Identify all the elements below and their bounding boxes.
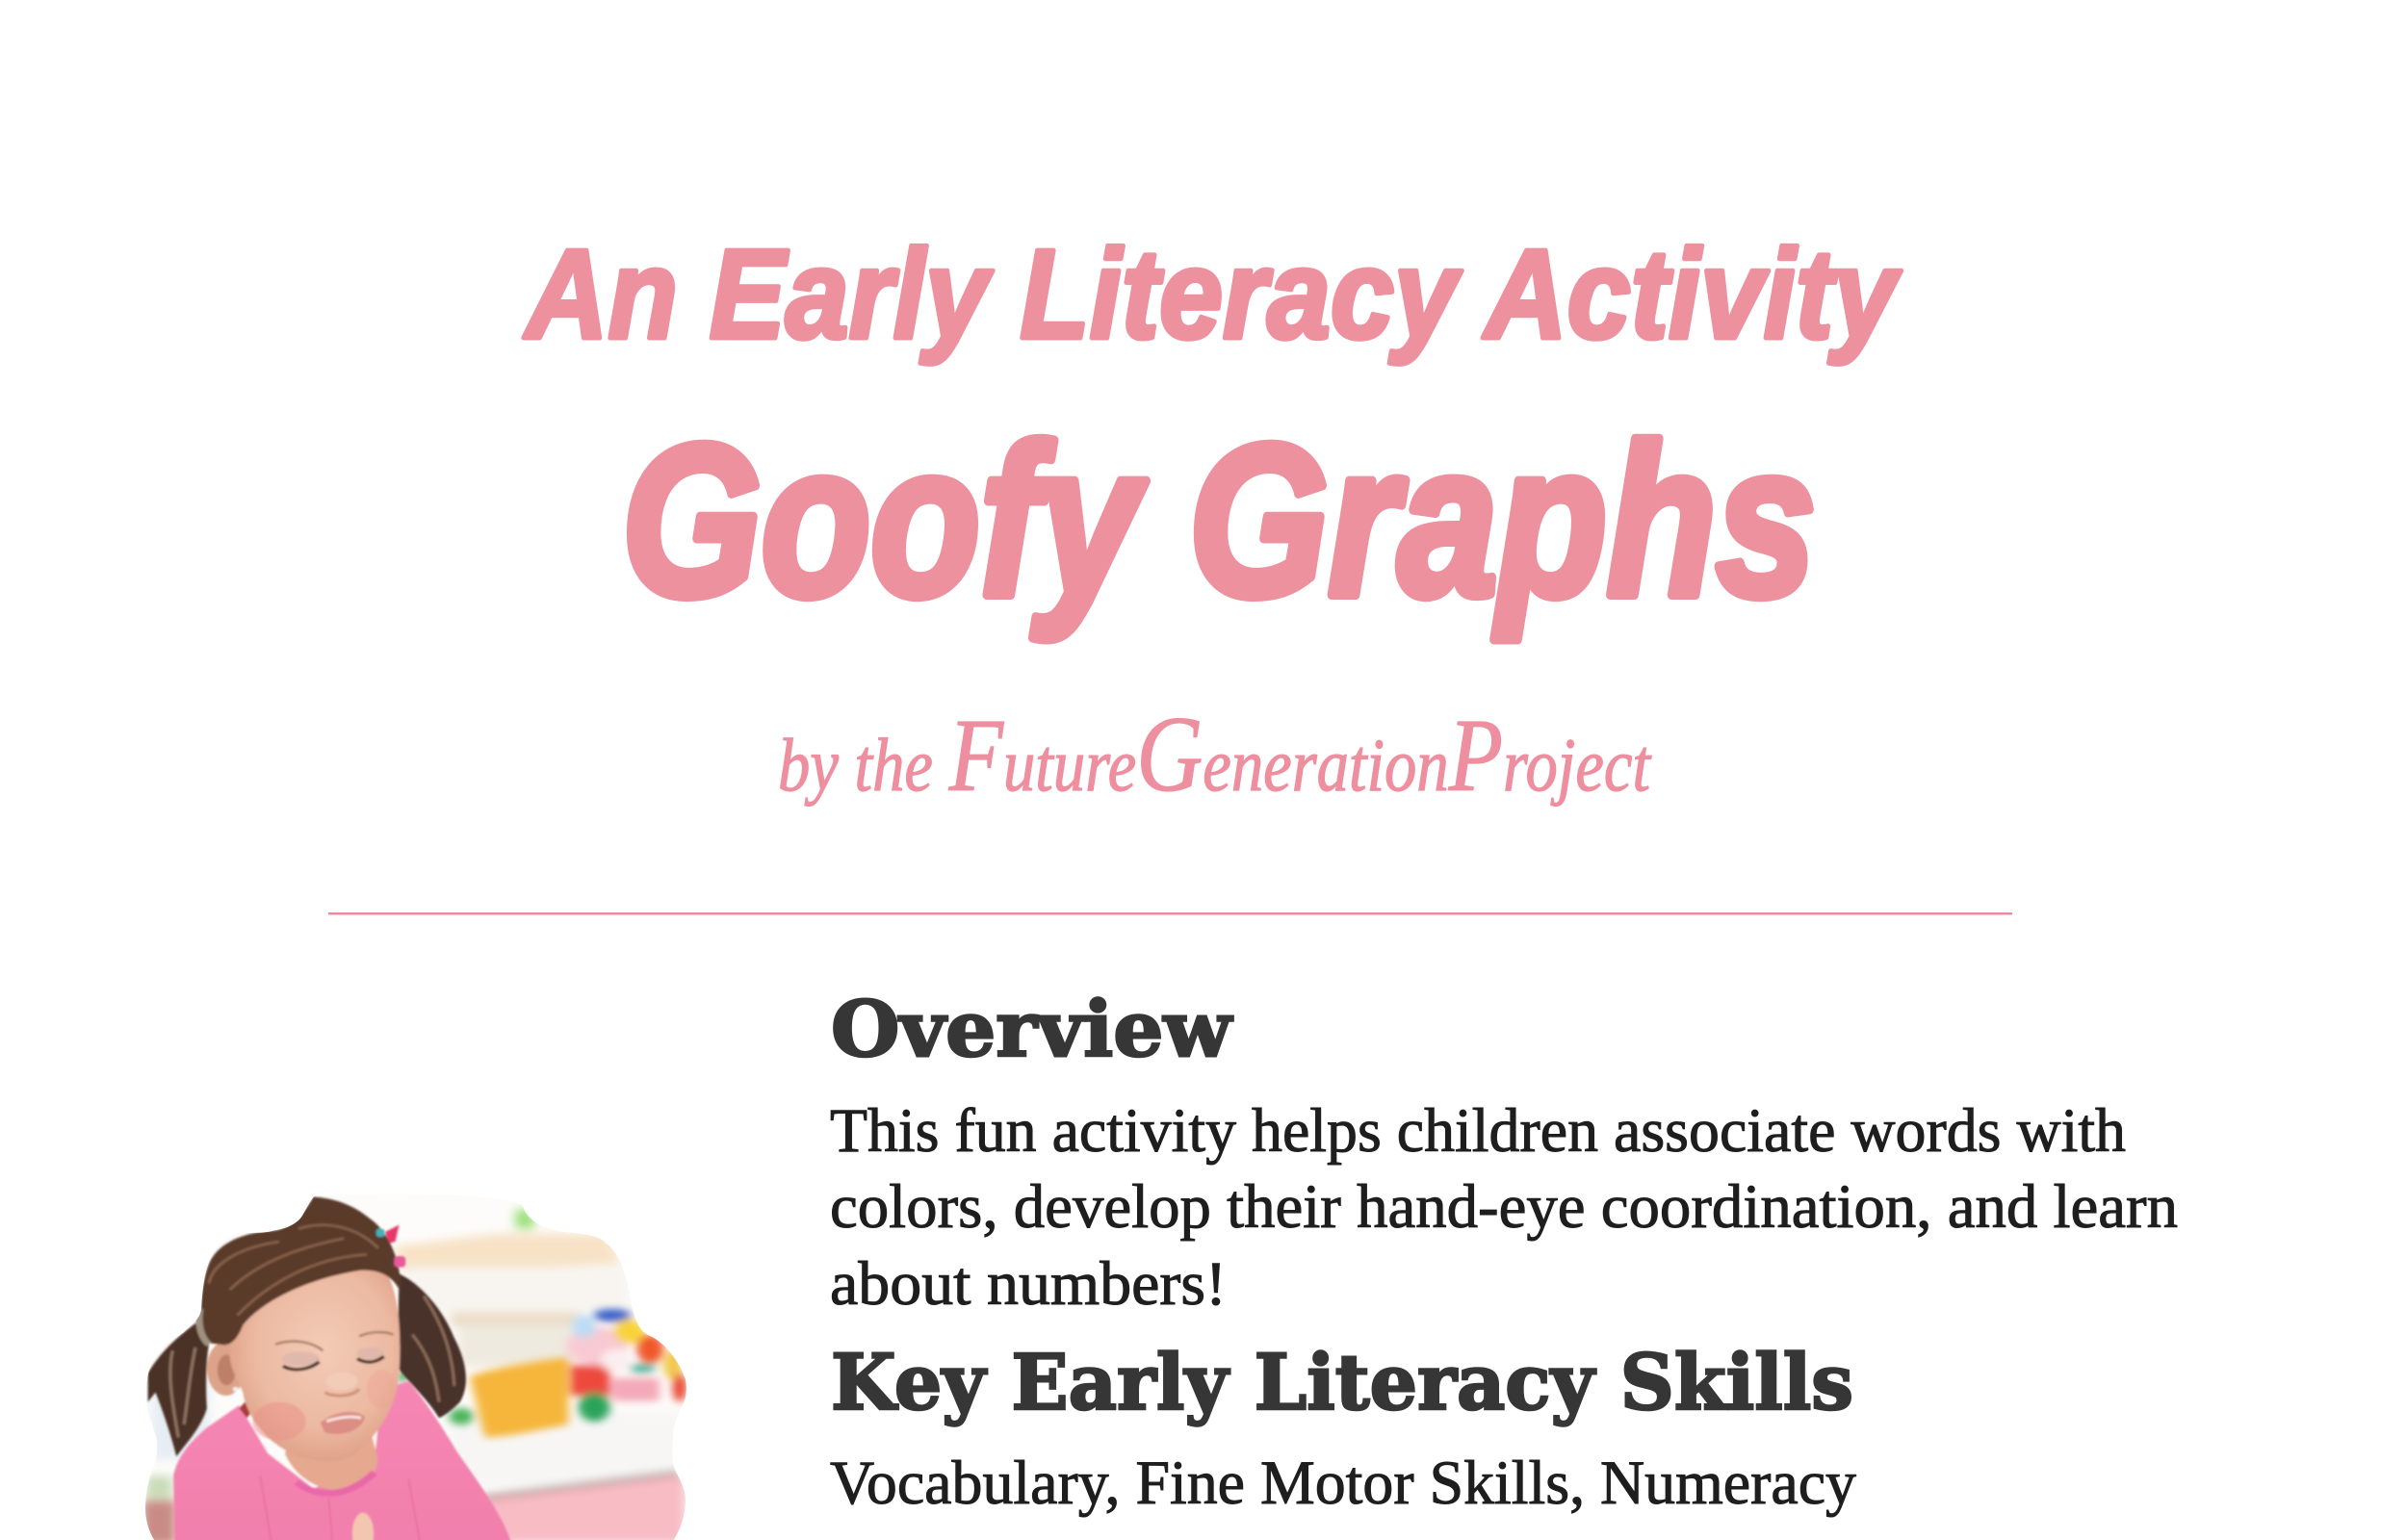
shirt <box>173 1381 511 1540</box>
title: Goofy Graphs: Goofy Graphs <box>622 400 1816 641</box>
face <box>229 1267 400 1462</box>
mouth <box>321 1412 365 1434</box>
ear <box>207 1341 245 1396</box>
nose <box>326 1373 358 1390</box>
overview paragraph: about numbers! <box>830 1249 1227 1319</box>
heading: Key Early Literacy Skills: Key Early Literacy Skills <box>831 1337 1853 1427</box>
byline: by the Future Generation Project: by the FutureGenerationProject <box>778 695 1652 814</box>
overview paragraph: This fun activity helps children associate words with <box>830 1096 2126 1166</box>
overview paragraph: colors, develop their hand-eye coordination, and learn <box>830 1172 2178 1242</box>
hair ties <box>385 1225 399 1244</box>
skills list: Vocabulary, Fine Motor Skills, Numeracy <box>830 1449 1856 1518</box>
hand <box>352 1513 374 1540</box>
front hair <box>201 1196 401 1345</box>
overview paragraph <box>830 1096 2178 1319</box>
heading: Overview: Overview <box>831 984 1233 1074</box>
photo: toddler in pink shirt with toys behind her <box>145 1195 686 1540</box>
divider line <box>328 912 2012 914</box>
title: An Early Literacy Activity: An Early Literacy Activity <box>523 223 1902 365</box>
pigtails <box>148 1319 211 1456</box>
eyes and brows <box>275 1342 323 1350</box>
